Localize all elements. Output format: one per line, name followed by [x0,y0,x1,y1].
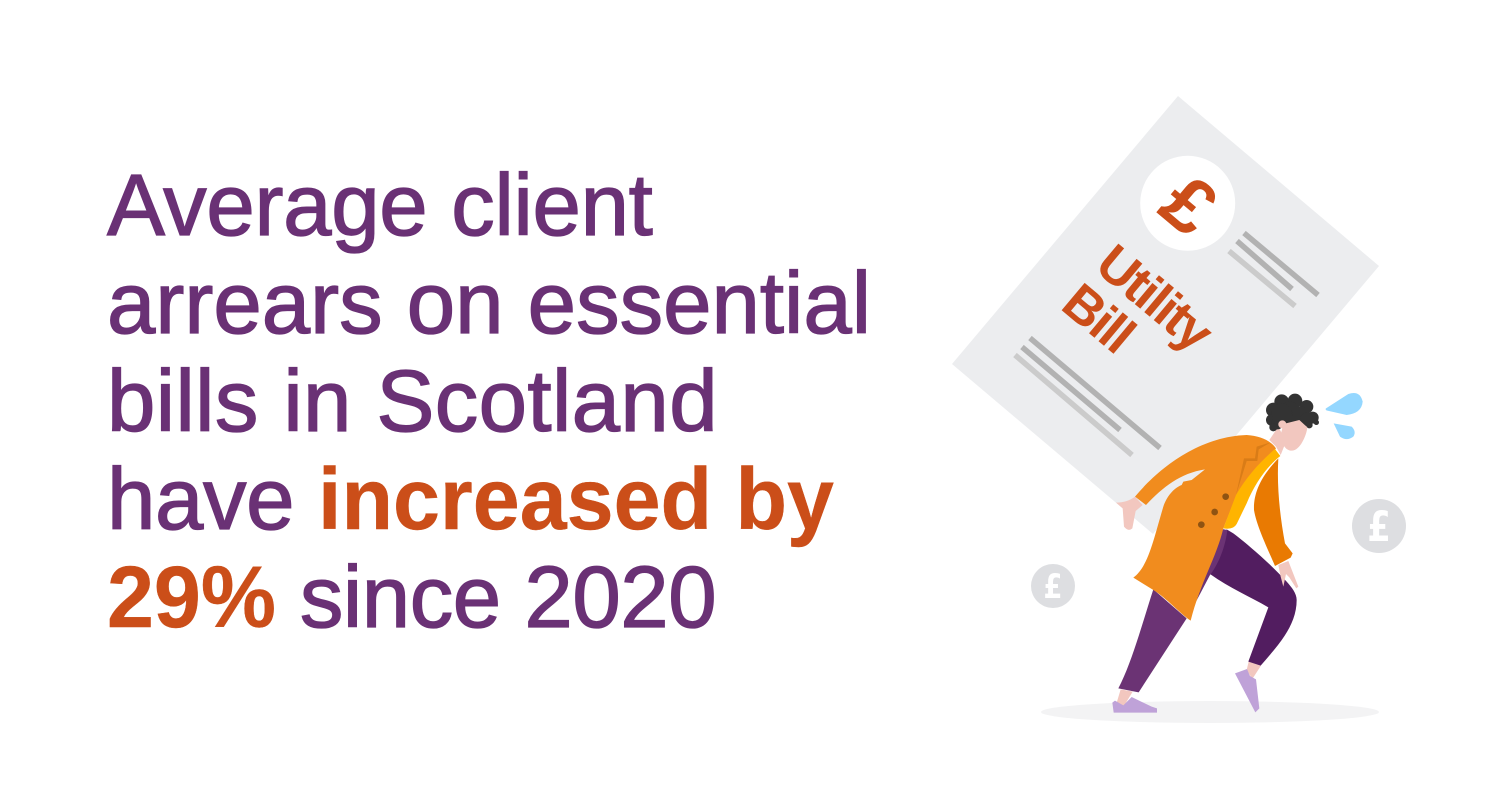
title: headline statement: have [107,451,294,548]
icon: utility bill document: Utility [1085,234,1224,363]
figure: stressed person [1112,393,1363,713]
title: headline statement: bills in Scotland [107,353,718,450]
title: headline statement: 29% [107,549,276,646]
title: headline statement: since 2020 [300,549,716,646]
title: headline statement: increased by [318,451,834,548]
icon: utility bill document [952,96,1379,534]
ground shadow [1041,701,1379,723]
title: headline statement: arrears on essential [107,255,871,352]
icon: pound coin left [1031,564,1075,608]
icon: pound coin right: £ [1367,502,1391,551]
icon: utility bill document: Bill [1051,273,1144,364]
icon: pound coin left: £ [1044,567,1062,607]
title: headline statement: Average client [107,157,653,254]
title: headline statement [106,157,871,646]
icon: utility bill document: £ [1144,157,1234,252]
icon: pound coin right [1352,499,1406,553]
